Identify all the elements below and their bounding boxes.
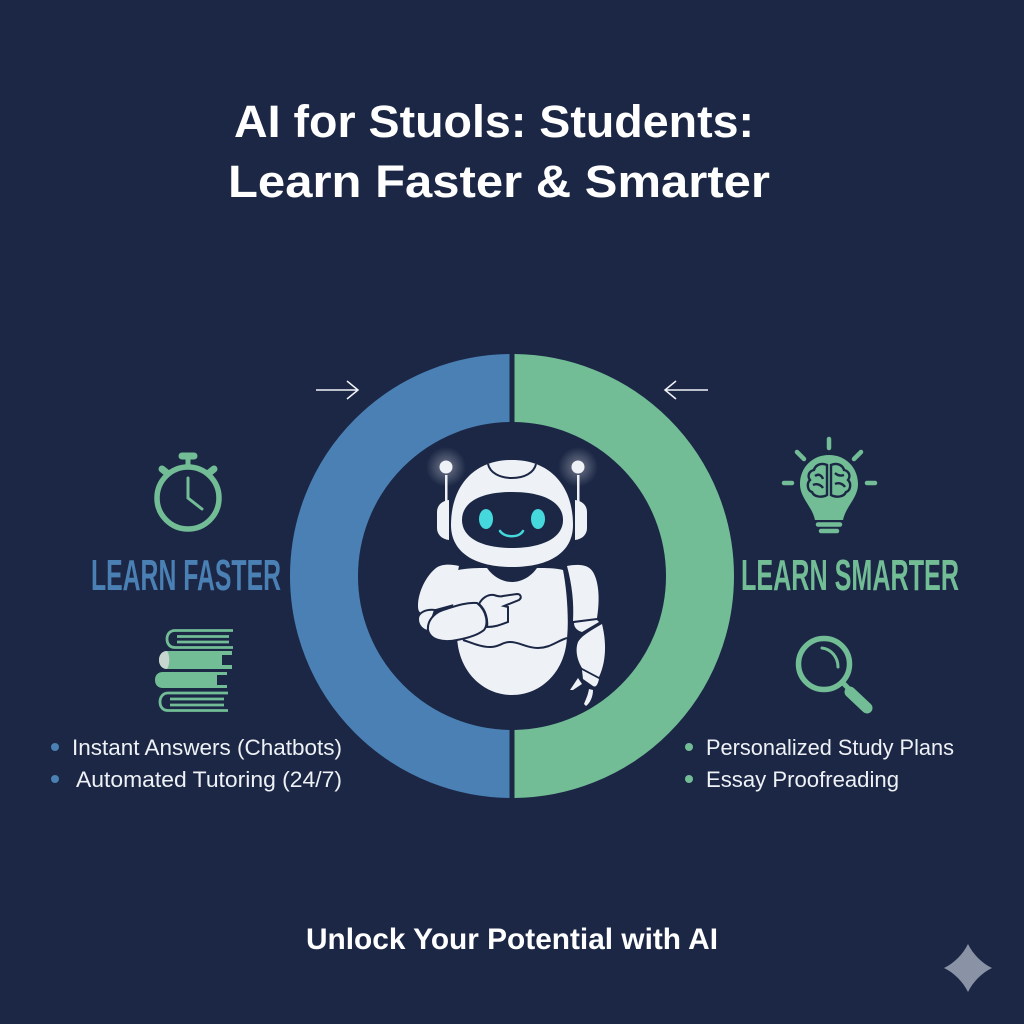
forearm — [428, 603, 486, 641]
bullet list: learn smarter: Personalized Study Plans — [706, 735, 954, 760]
icon: stopwatch — [157, 456, 219, 529]
bulb rays — [784, 439, 875, 483]
icon: stack of books — [155, 630, 233, 710]
forearm — [577, 624, 605, 677]
robot belly seam — [463, 638, 567, 648]
left elbow — [418, 610, 435, 631]
brain — [808, 464, 850, 497]
book: top outline — [167, 630, 233, 648]
icon: lightbulb with brain — [784, 439, 875, 531]
bullet list: learn smarter: Essay Proofreading — [706, 767, 899, 792]
bullet list: learn faster — [51, 735, 342, 792]
robot visor — [462, 492, 563, 548]
title: AI for Stuols: Students: — [234, 96, 754, 147]
title — [228, 96, 770, 207]
arrow: left-pointing into ring — [665, 381, 708, 399]
left shoulder — [418, 565, 459, 613]
wrist — [582, 670, 599, 687]
robot left arm — [418, 565, 521, 641]
icon: sparkle — [944, 944, 992, 992]
bullet list: learn faster: Instant Answers (Chatbots) — [72, 735, 342, 760]
book: bottom outline — [160, 693, 228, 710]
bullet list: learn faster: Automated Tutoring (24/7) — [76, 767, 342, 792]
robot antennas — [426, 447, 598, 502]
robot eyes — [479, 509, 545, 529]
robot head cap line — [488, 464, 536, 478]
robot right arm — [567, 565, 605, 706]
robot smile — [500, 531, 523, 536]
bulb body — [800, 455, 858, 520]
book: second filled — [159, 651, 232, 669]
robot ears — [437, 500, 587, 540]
tagline: Unlock Your Potential with AI — [306, 923, 718, 956]
claws — [570, 678, 582, 690]
robot head — [451, 460, 573, 567]
central ring — [324, 388, 700, 764]
title: Learn Faster & Smarter — [228, 156, 770, 207]
heading: learn faster: LEARN FASTER — [91, 551, 281, 600]
infographic canvas — [51, 104, 992, 992]
icon: magnifying glass — [798, 638, 867, 708]
book: third filled — [155, 672, 227, 688]
ring: blue half — [290, 354, 510, 798]
arrow: right-pointing into ring — [316, 381, 358, 399]
bulb base — [818, 524, 840, 531]
ring: green half — [514, 354, 734, 798]
upper arm — [567, 565, 599, 621]
robot torso — [452, 568, 568, 648]
robot mascot — [418, 447, 605, 706]
robot lower body — [457, 634, 567, 695]
book: spine highlight — [159, 651, 169, 669]
bullet list: learn smarter — [685, 735, 954, 792]
elbow joint — [574, 620, 599, 632]
hand — [479, 594, 521, 627]
